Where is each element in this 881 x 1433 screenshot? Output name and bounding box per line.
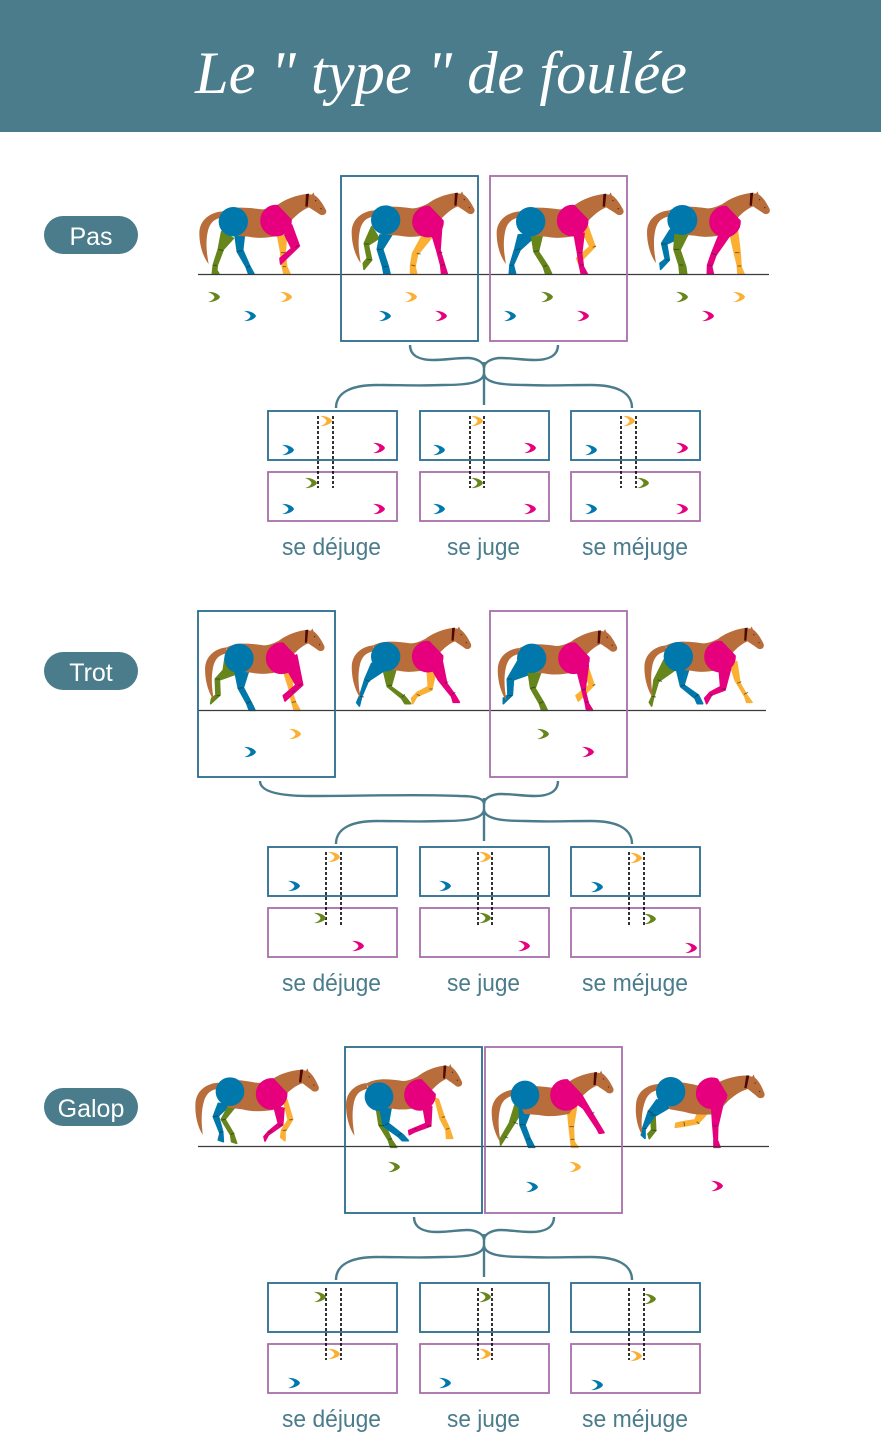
captions: Pas: se juge (447, 534, 520, 561)
horses: Pas (199, 191, 475, 274)
horse 1 (199, 192, 326, 274)
horses: Trot, right pair (498, 626, 764, 710)
captions: Trot: se juge (447, 970, 520, 997)
title banner (0, 0, 881, 132)
horse 6 (352, 626, 471, 706)
footprints: Pas (208, 292, 745, 321)
horse 12 (633, 1063, 767, 1147)
horses: Galop (194, 1063, 462, 1147)
comparison boxes: Galop (268, 1283, 700, 1393)
captions: Trot (282, 970, 688, 997)
label pill: Trot: Trot (69, 659, 113, 687)
brace (336, 345, 632, 408)
captions: Pas (282, 534, 688, 561)
horse 11 (492, 1071, 614, 1147)
ground line: Pas (198, 274, 769, 276)
section: Trot (44, 611, 766, 997)
captions: Pas: se méjuge (582, 534, 688, 561)
captions: Galop (282, 1406, 688, 1433)
box: blue stride frame (345, 1047, 482, 1213)
horse 10 (346, 1064, 462, 1147)
captions: Galop: se méjuge (582, 1406, 688, 1433)
brace (260, 781, 632, 844)
label pill: Pas: Pas (69, 223, 113, 251)
comparison boxes: Pas (268, 411, 700, 521)
label pill: Galop (44, 1088, 138, 1126)
horses: Trot (205, 626, 471, 710)
box: blue stride frame (341, 176, 478, 341)
horses: Galop, right pair (492, 1063, 767, 1147)
comparison boxes: Trot (268, 847, 700, 957)
box: purple stride frame (485, 1047, 622, 1213)
label pill: Pas (44, 216, 138, 254)
brace (336, 1217, 632, 1280)
footprints: Trot (244, 729, 594, 757)
horse 7 (498, 629, 617, 710)
horse 9 (194, 1063, 320, 1143)
captions: Trot: se déjuge (282, 970, 381, 997)
captions: Galop: se déjuge (282, 1406, 381, 1433)
ground line: Galop (198, 1146, 769, 1148)
box: purple stride frame (490, 611, 627, 777)
horse 5 (205, 628, 325, 710)
horse 3 (497, 192, 624, 274)
ground line: Trot (198, 710, 766, 712)
label pill: Trot (44, 652, 138, 690)
horse 2 (352, 191, 475, 274)
horse 8 (644, 626, 764, 706)
box: purple stride frame (490, 176, 627, 341)
captions: Pas: se déjuge (282, 534, 381, 561)
horses: Pas, right pair (497, 191, 770, 274)
section: Galop (44, 1047, 769, 1433)
section: Pas (44, 176, 770, 561)
title: Le " type " de foulée (194, 40, 687, 106)
box: blue stride frame (198, 611, 335, 777)
horse 4 (647, 191, 770, 274)
footprints: Galop (388, 1162, 723, 1192)
captions: Trot: se méjuge (582, 970, 688, 997)
captions: Galop: se juge (447, 1406, 520, 1433)
label pill: Galop: Galop (58, 1095, 124, 1123)
